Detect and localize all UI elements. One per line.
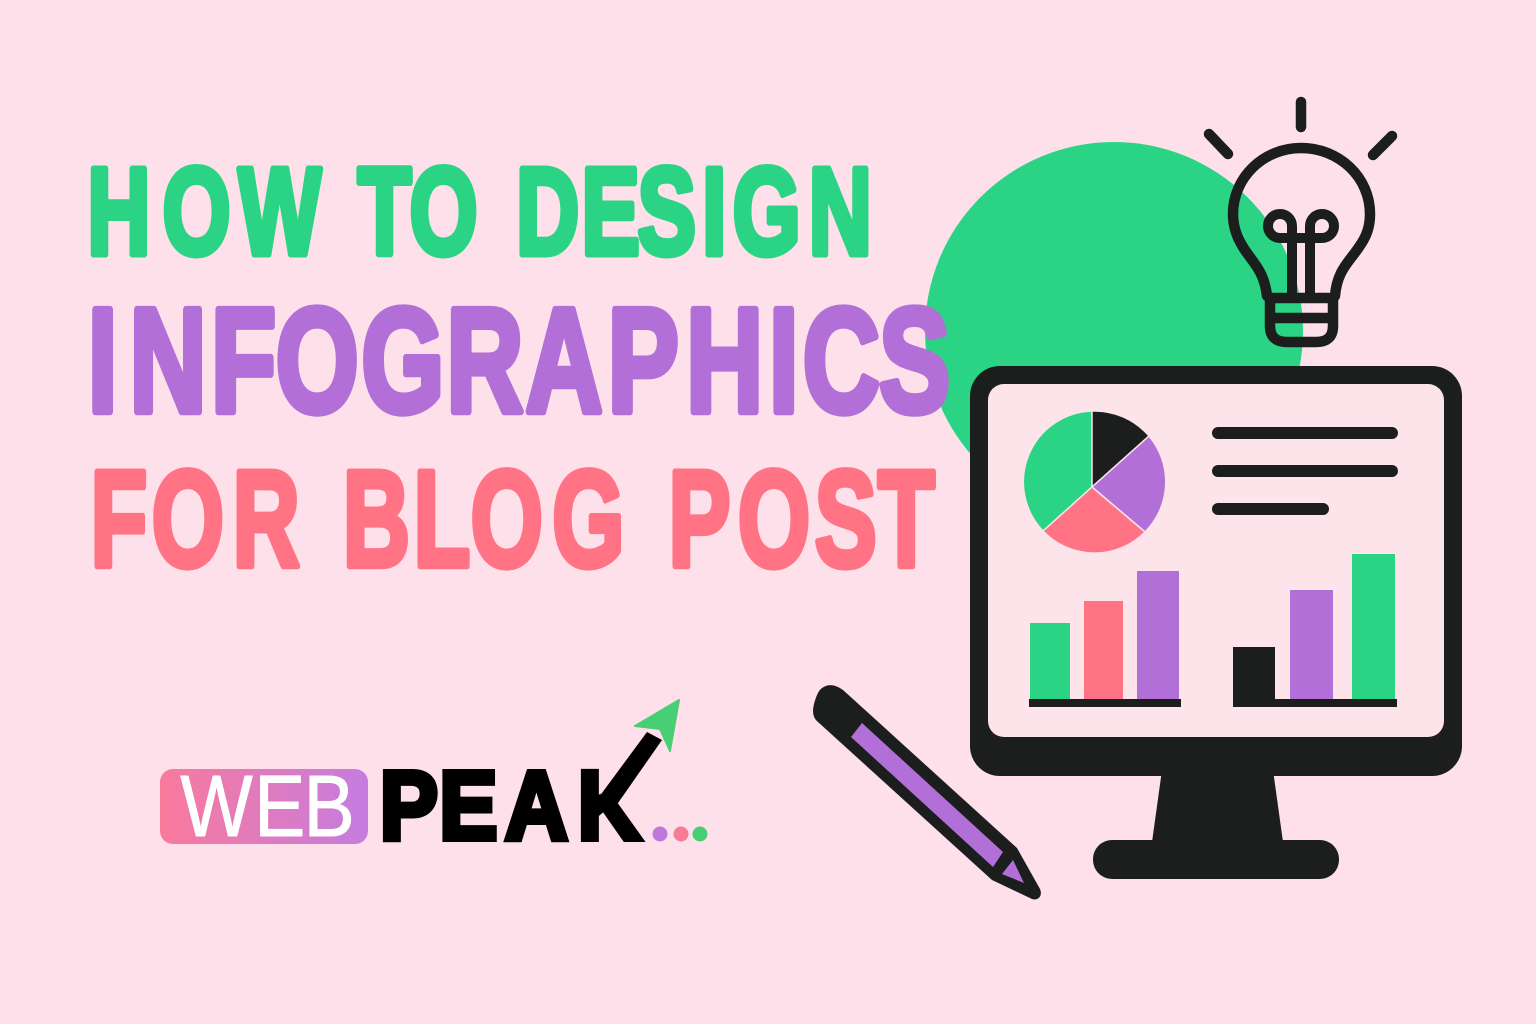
green circle (925, 142, 1303, 520)
monitor screen (988, 384, 1444, 737)
monitor base (1093, 840, 1339, 879)
logo: web badge (160, 769, 368, 844)
title (87, 142, 950, 595)
logo: peak text: PEAK (380, 751, 641, 860)
logo (160, 700, 708, 860)
bulb base (1270, 298, 1333, 342)
bulb filament (1268, 214, 1334, 296)
heading: infographics: INFOGRAPHICS (88, 278, 950, 444)
pencil body (813, 685, 1041, 899)
monitor frame (970, 366, 1462, 776)
icon: pencil (813, 685, 1041, 899)
pie chart (1023, 411, 1166, 553)
pencil tip (1002, 860, 1024, 883)
pencil barrel (851, 723, 1003, 867)
logo: arrow shaft (599, 732, 662, 806)
bulb glass (1233, 148, 1370, 296)
icon: light bulb (1209, 102, 1392, 342)
logo: arrow head (635, 700, 679, 751)
monitor (970, 366, 1462, 879)
logo: dots (652, 826, 708, 842)
heading: for blog post: FOR BLOG POST (90, 442, 935, 595)
monitor stand (1152, 770, 1283, 842)
bar chart: right (1233, 554, 1397, 707)
text lines (1218, 433, 1392, 509)
bar chart: left (1029, 571, 1181, 707)
logo: k arm cut-outs (600, 758, 662, 803)
heading: how to design: HOW TO DESIGN (87, 142, 872, 281)
bulb rays (1209, 102, 1392, 155)
logo: web text: WEB (180, 758, 355, 855)
